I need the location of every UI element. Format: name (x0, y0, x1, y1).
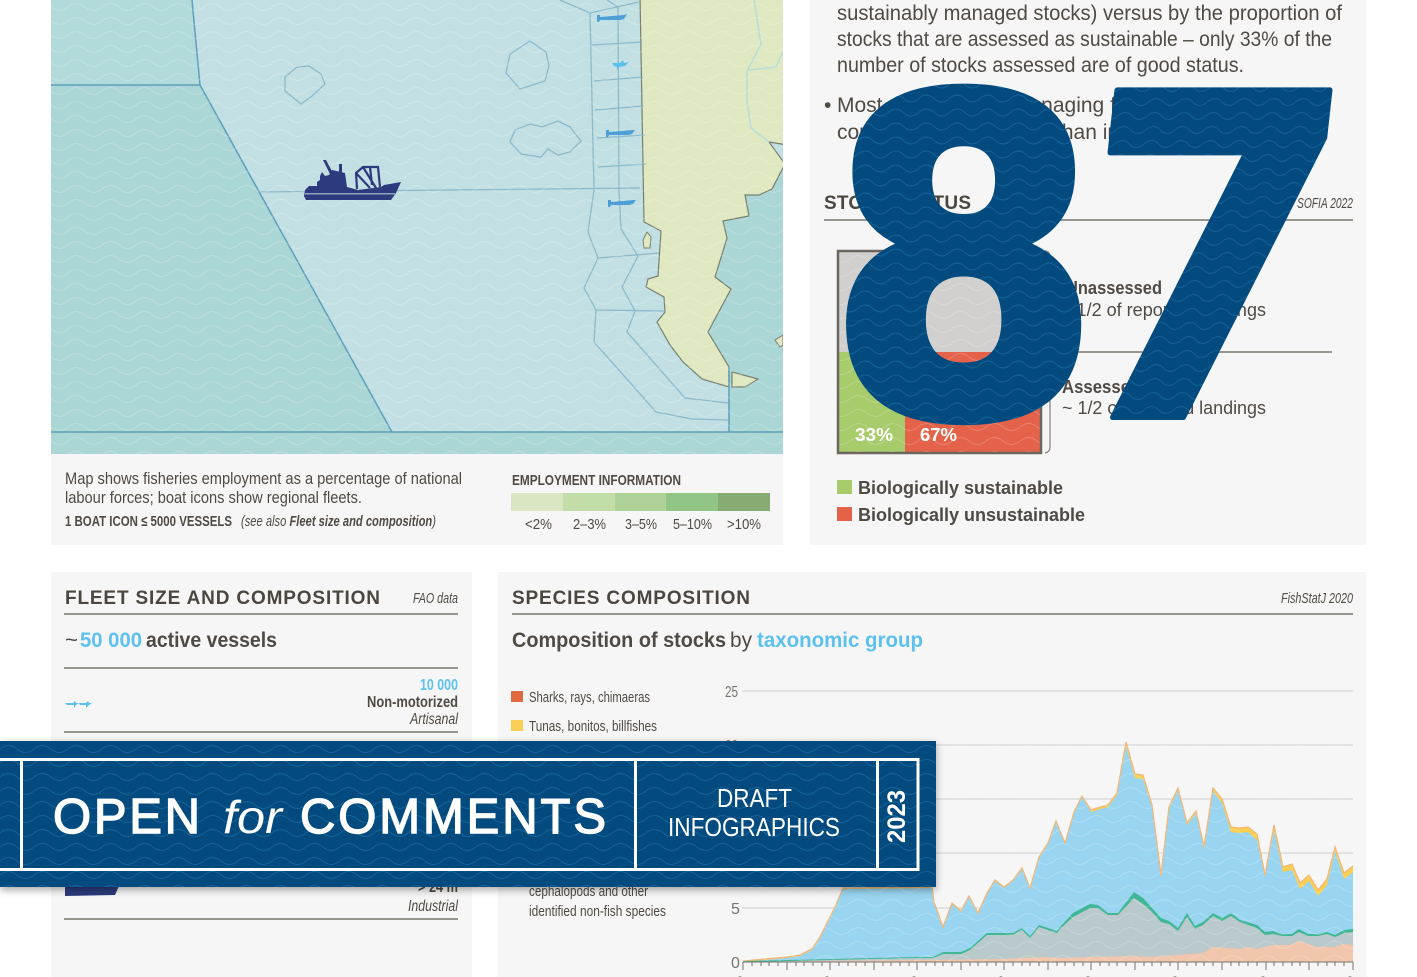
boat icon key: (see also Fleet size and composition) (241, 514, 436, 530)
x axis year labels (718, 973, 1359, 977)
y axis labels (725, 684, 740, 972)
employment legend: <2% (525, 516, 552, 533)
intro text (837, 2, 1342, 77)
chart subtitle: by (730, 629, 752, 652)
bullet text: managing fisheries (1012, 94, 1188, 117)
heading: stock status (824, 193, 1353, 220)
status legend: Biologically sustainable (858, 477, 1063, 498)
maritime boundaries (51, 0, 783, 432)
grey band (743, 898, 1353, 962)
y axis labels: 20 (725, 738, 738, 755)
banner title: OPEN (53, 790, 200, 844)
label: assessed (1062, 377, 1266, 418)
heading: species: SPECIES COMPOSITION (512, 588, 750, 609)
panel: fleet size and composition (51, 572, 472, 977)
peach band (743, 941, 1353, 962)
heading: stock status: SOFIA 2022 (1297, 195, 1353, 212)
rivers (747, 0, 783, 142)
bullet text: • (824, 94, 831, 117)
icon: industrial ship (304, 160, 401, 200)
row: non-motorized: Artisanal (409, 711, 458, 728)
darker sea zones (51, 0, 785, 454)
green band (743, 892, 1353, 962)
chart legend (511, 689, 666, 920)
heading: fleet (64, 588, 458, 614)
label: assessed: ~ 1/2 of reported landings (1062, 398, 1266, 418)
top outline (743, 742, 1353, 961)
employment legend (511, 472, 770, 533)
label: unassessed (1061, 278, 1266, 320)
row: industrial: > 24 m (418, 879, 458, 896)
label: unassessed: ~ 1/2 of reported landings (1061, 300, 1266, 320)
banner: open for comments (0, 741, 936, 887)
area chart (718, 684, 1359, 977)
row: non-motorized: Non-motorized (367, 694, 458, 711)
map panel (51, 0, 800, 454)
heading: species: FishStatJ 2020 (1281, 590, 1353, 607)
bullet text: complex and costly (837, 121, 1016, 144)
heading: species (512, 588, 1353, 614)
chart subtitle (512, 629, 923, 652)
cape islet (732, 372, 758, 387)
page number 87: 7 (1043, 2, 1370, 524)
chart legend: identified non-fish species (529, 903, 666, 920)
boat icon key (65, 513, 436, 530)
stacked status box (838, 251, 1041, 453)
intro text: sustainably managed stocks) versus by the proportion of (837, 2, 1342, 25)
chart subtitle: taxonomic group (757, 629, 923, 652)
intro text: number of stocks assessed are of good status. (837, 54, 1244, 77)
label: unassessed: Unassessed (1066, 278, 1162, 298)
row: non-motorized (64, 677, 458, 732)
panel: stock status text and chart (810, 0, 1366, 545)
stacked status box: 33% (855, 425, 893, 445)
chart legend: cephalopods and other (529, 883, 648, 900)
intro text: stocks that are assessed as sustainable – only 33% of the (837, 28, 1332, 51)
panel: map caption (51, 454, 783, 545)
y axis labels: 0 (731, 955, 740, 972)
employment legend: EMPLOYMENT INFORMATION (512, 472, 681, 489)
status legend: Biologically unsustainable (858, 504, 1085, 525)
chart legend: Tunas, bonitos, billfishes (529, 718, 657, 735)
page number 87 (827, 2, 1370, 524)
blue pelagic band (743, 746, 1353, 962)
banner subtitle: DRAFT (717, 783, 792, 813)
active vessels figure: active vessels (146, 629, 277, 652)
chart subtitle: Composition of stocks (512, 629, 726, 652)
map description: labour forces; boat icons show regional fleets. (65, 488, 362, 507)
chart legend: Sharks, rays, chimaeras (529, 689, 650, 706)
y axis labels: 5 (731, 901, 740, 918)
heading: fleet: FLEET SIZE AND COMPOSITION (65, 588, 380, 609)
boat icon key: 1 BOAT ICON ≤ 5000 VESSELS (65, 513, 232, 530)
banner subtitle: INFOGRAPHICS (668, 812, 840, 842)
heading: stock status: STOCK STATUS (824, 193, 971, 214)
employment legend: >10% (727, 516, 761, 533)
active vessels figure (64, 629, 458, 668)
active vessels figure: ~ (65, 629, 78, 652)
employment legend: 5–10% (673, 516, 712, 533)
status legend (837, 477, 1085, 525)
small island (643, 232, 651, 248)
y axis labels: 25 (725, 684, 738, 701)
bullet text (824, 94, 1188, 144)
bullet text: Most challenges for (837, 94, 1019, 117)
banner frame (0, 760, 918, 870)
row: non-motorized: 10 000 (420, 677, 458, 694)
heading: fleet: FAO data (413, 590, 458, 607)
brackets (1045, 251, 1050, 453)
map description: Map shows fisheries employment as a percentage of national (65, 469, 462, 488)
page number 87: 8 (827, 9, 1101, 518)
map description (65, 469, 462, 507)
employment legend: 3–5% (625, 516, 657, 533)
yellow tunas band (743, 742, 1353, 962)
banner title: COMMENTS (300, 790, 606, 844)
employment legend: 2–3% (573, 516, 606, 533)
active vessels figure: 50 000 (80, 629, 142, 652)
bullet text: than in (1056, 121, 1119, 144)
x axis ticks (743, 962, 1353, 970)
banner year: 2023 (883, 790, 911, 843)
panel: species composition (498, 572, 1366, 977)
label: assessed: Assessed stocks (1062, 377, 1198, 397)
row: industrial: Industrial (408, 898, 458, 915)
banner title (53, 790, 606, 844)
stacked status box: 67% (920, 425, 957, 445)
land mass (640, 0, 783, 388)
banner subtitle (668, 783, 840, 842)
east island (775, 335, 783, 347)
icon: small blue boats (597, 14, 636, 207)
banner title: for (223, 791, 284, 843)
row: industrial (64, 879, 458, 919)
